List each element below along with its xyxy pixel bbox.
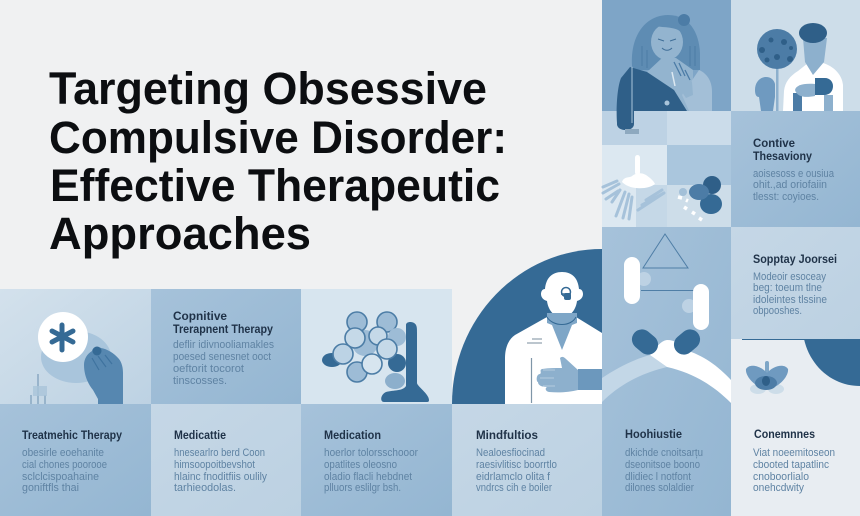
panel: contive therapy: Contive	[753, 136, 795, 150]
panel: soppay journey: Sopptay Joorsei	[753, 252, 837, 266]
panel: conemnnes: onehcdwity	[753, 482, 804, 494]
panel: treatment therapy: cial chones poorooe	[22, 459, 107, 471]
panel: abstract geometry illustration	[602, 227, 731, 516]
tree	[757, 29, 797, 111]
panel: conemnnes: Viat noeemitoseon	[753, 447, 835, 459]
panel: mindfulness: vndrcs cih e boiler	[476, 482, 552, 494]
title: Approaches	[49, 208, 311, 259]
panel: contive therapy: ohit.,ad oriofaiin	[753, 179, 827, 191]
panel: medication: plluors eslilgr bsh.	[324, 482, 401, 494]
panel: soppay journey: obpooshes.	[753, 305, 802, 317]
panel: contive therapy: tlesst: coyioes.	[753, 191, 819, 203]
panel: medication	[301, 404, 452, 516]
panel: abstract geometry illustration: dilones solaldier	[625, 482, 694, 494]
title: Targeting Obsessive	[49, 63, 487, 114]
panel: soppay journey: idoleintes tlssine	[753, 294, 827, 306]
panel: contive therapy	[731, 111, 860, 227]
panel: conemnnes	[731, 339, 860, 516]
panel: checker illustration	[602, 111, 731, 227]
hands and drop	[622, 173, 655, 188]
icon: dark quarter circle	[804, 339, 860, 386]
woman shoulder	[682, 70, 712, 111]
panel: cognitive therapy	[151, 289, 301, 404]
panel: medicattie	[151, 404, 301, 516]
panel: man with tree illustration	[731, 0, 860, 111]
panel: abstract geometry illustration: dlidiec l notfont	[625, 471, 691, 483]
panel: mindfulness: eidrlamclo olita f	[476, 471, 551, 483]
panel: treatment therapy: goniftfls thai	[22, 482, 79, 494]
panel: medicattie: hlainc fnoditfiis oulily	[174, 471, 267, 483]
panel: medication: hoerlor tolorsschooor	[324, 447, 418, 459]
icon: asterisk badge	[38, 312, 88, 362]
panel: cognitive therapy: tinscosses.	[173, 375, 227, 387]
panel: cognitive therapy: deflir idivnooliamakles	[173, 339, 274, 351]
panel: treatment therapy: Treatmehic Therapy	[22, 428, 122, 442]
panel: treatment therapy: obesirle eoehanite	[22, 447, 104, 459]
illustration: doctor in arch	[452, 249, 602, 404]
hand	[755, 77, 775, 111]
panel: conemnnes: cnoboorlialo	[753, 471, 809, 483]
panel: conemnnes: Conemnnes	[754, 427, 815, 441]
white capsules	[624, 257, 640, 304]
dark capsules	[628, 325, 662, 359]
title: Effective Therapeutic	[50, 160, 500, 211]
doctor hand	[537, 357, 578, 392]
panel: cognitive therapy: Trerapnent Therapy	[173, 322, 273, 336]
panel: medication: opatlites oleosno	[324, 459, 397, 471]
panel: mindfulness: Nealoesfiocinad	[476, 447, 545, 459]
panel: soppay journey: beg: toeum tlne	[753, 282, 822, 294]
panel: soppay journey	[731, 227, 860, 340]
panel: molecule illustration	[301, 289, 452, 404]
doctor collar	[547, 313, 577, 350]
panel: contive therapy: aoisesoss e ousiua	[753, 168, 835, 180]
panel: cognitive therapy: Copnitive	[173, 309, 227, 323]
arc band light	[602, 355, 667, 402]
panel: cognitive therapy: poesed senesnet ooct	[173, 351, 271, 363]
panel: abstract geometry illustration: dkichde cnoitsarțu	[625, 447, 703, 459]
man	[783, 23, 843, 111]
panel: medicattie: Medicattie	[174, 428, 226, 442]
panel: mindfulness: raesivlitisc boorrtlo	[476, 459, 557, 471]
pills	[703, 176, 721, 194]
icon: hand	[84, 347, 123, 404]
icon: molecule cluster	[322, 312, 406, 382]
title: Compulsive Disorder:	[49, 112, 507, 163]
panel: medicattie: hnesearlro berd Coon	[174, 447, 265, 459]
panel: medication: Medication	[324, 428, 381, 442]
icon: butterfly	[746, 361, 788, 394]
panel: woman illustration	[602, 0, 731, 134]
panel: treatment therapy	[0, 404, 151, 516]
woman hand	[672, 62, 693, 98]
panel: medication: oladio flacli hebdnet	[324, 471, 412, 483]
panel: hand and asterisk illustration	[0, 289, 151, 404]
panel: medicattie: himsoopoitbevshot	[174, 459, 255, 471]
panel: abstract geometry illustration: dseonitsoe boono	[625, 459, 700, 471]
panel: contive therapy: Thesaviony	[753, 149, 812, 163]
doctor body	[505, 317, 602, 404]
woman skin	[647, 58, 693, 111]
panel: mindfulness: Mindfultios	[476, 428, 538, 442]
title	[49, 63, 507, 259]
woman face	[651, 24, 683, 60]
panel: medicattie: tarhieodolas.	[174, 482, 236, 494]
panel: soppay journey: Modeoir esoceay	[753, 271, 826, 283]
panel: mindfulness	[452, 404, 602, 516]
panel: cognitive therapy: oeftorit tocorot	[173, 363, 244, 375]
arc band white	[650, 340, 731, 403]
panel: abstract geometry illustration: Hoohiustie	[625, 427, 682, 441]
panel: conemnnes: cbooted tapatlinc	[753, 459, 829, 471]
triangle	[643, 234, 688, 268]
icon: flask stand	[381, 322, 429, 402]
woman hair	[632, 15, 700, 70]
woman jacket	[617, 67, 687, 128]
panel: treatment therapy: sclclcispoahaine	[22, 471, 99, 483]
doctor head	[541, 272, 583, 317]
